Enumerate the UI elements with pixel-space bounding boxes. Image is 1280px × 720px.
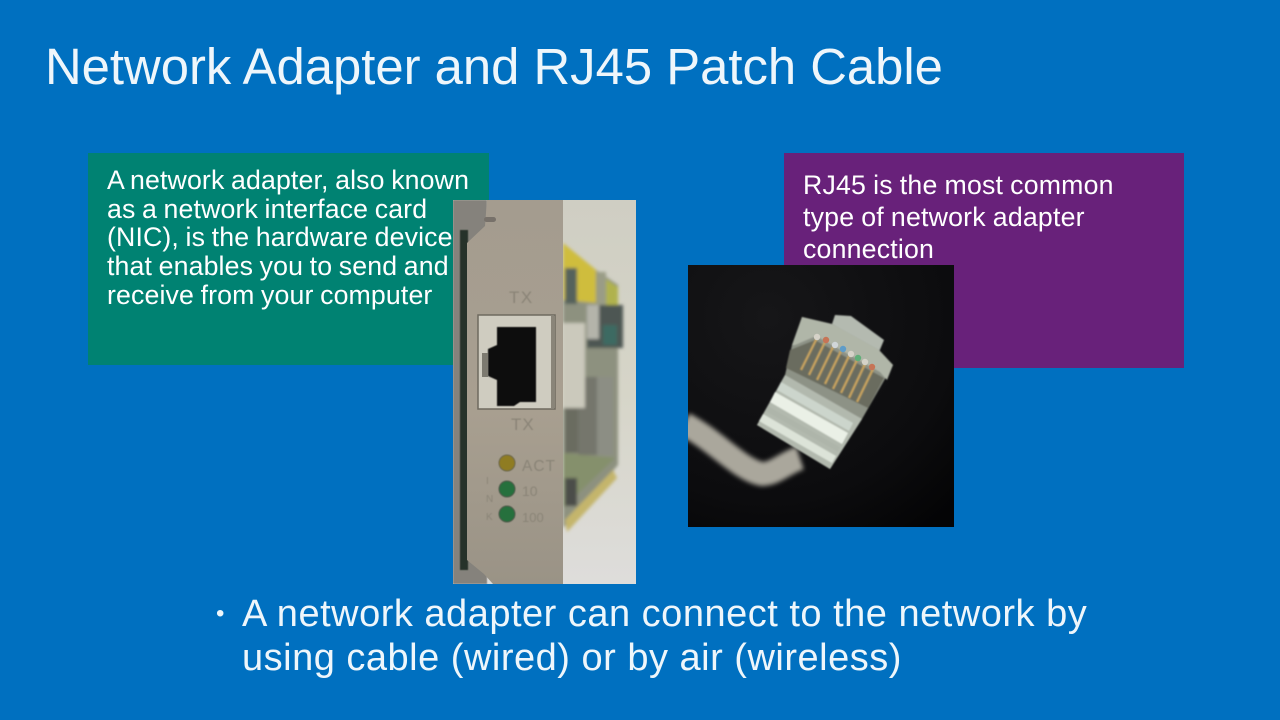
photo: RJ45 connector [688, 265, 954, 527]
engraved marks [486, 288, 556, 525]
coloured wire tips [814, 334, 875, 370]
text: network adapter description: (NIC), is the hardware device [107, 222, 453, 252]
bullet text: A network adapter can connect to the network by [242, 593, 1087, 635]
text: network adapter description: A network adapter, also known [107, 165, 469, 195]
panel: RJ45 description [784, 153, 1184, 368]
text: network adapter description: receive from your computer [107, 280, 432, 310]
port [478, 315, 555, 409]
text: network adapter description: as a network interface card [107, 194, 427, 224]
engraved marks: TX [509, 288, 534, 307]
engraved marks: N [486, 494, 493, 505]
circuit board behind the bracket [563, 243, 623, 532]
bullet text: • [216, 600, 225, 627]
indicator lights [499, 455, 515, 522]
engraved marks: I [486, 476, 489, 487]
text: RJ45 description: RJ45 is the most common [803, 170, 1114, 200]
engraved marks: K [486, 512, 493, 523]
title: Network Adapter and RJ45 Patch Cable [45, 38, 943, 95]
text: RJ45 description: connection [803, 234, 934, 264]
cable [684, 424, 800, 474]
engraved marks: ACT [522, 458, 556, 475]
text: network adapter description: that enables you to send and [107, 251, 449, 281]
panel: network adapter description [88, 153, 489, 365]
bullet text: using cable (wired) or by air (wireless) [242, 637, 902, 679]
left edge of bracket [453, 200, 487, 584]
text: RJ45 description [803, 170, 1114, 264]
bullet text [216, 593, 1087, 679]
gold contacts [801, 338, 873, 402]
text: network adapter description [107, 165, 469, 310]
plug body [757, 315, 893, 469]
metal plate [467, 200, 563, 584]
engraved marks: 100 [522, 510, 544, 525]
text: RJ45 description: type of network adapter [803, 202, 1085, 232]
engraved marks: 10 [522, 483, 538, 499]
engraved marks: TX [511, 415, 535, 434]
connector ribs [777, 382, 853, 431]
photo: network adapter card [453, 200, 636, 584]
